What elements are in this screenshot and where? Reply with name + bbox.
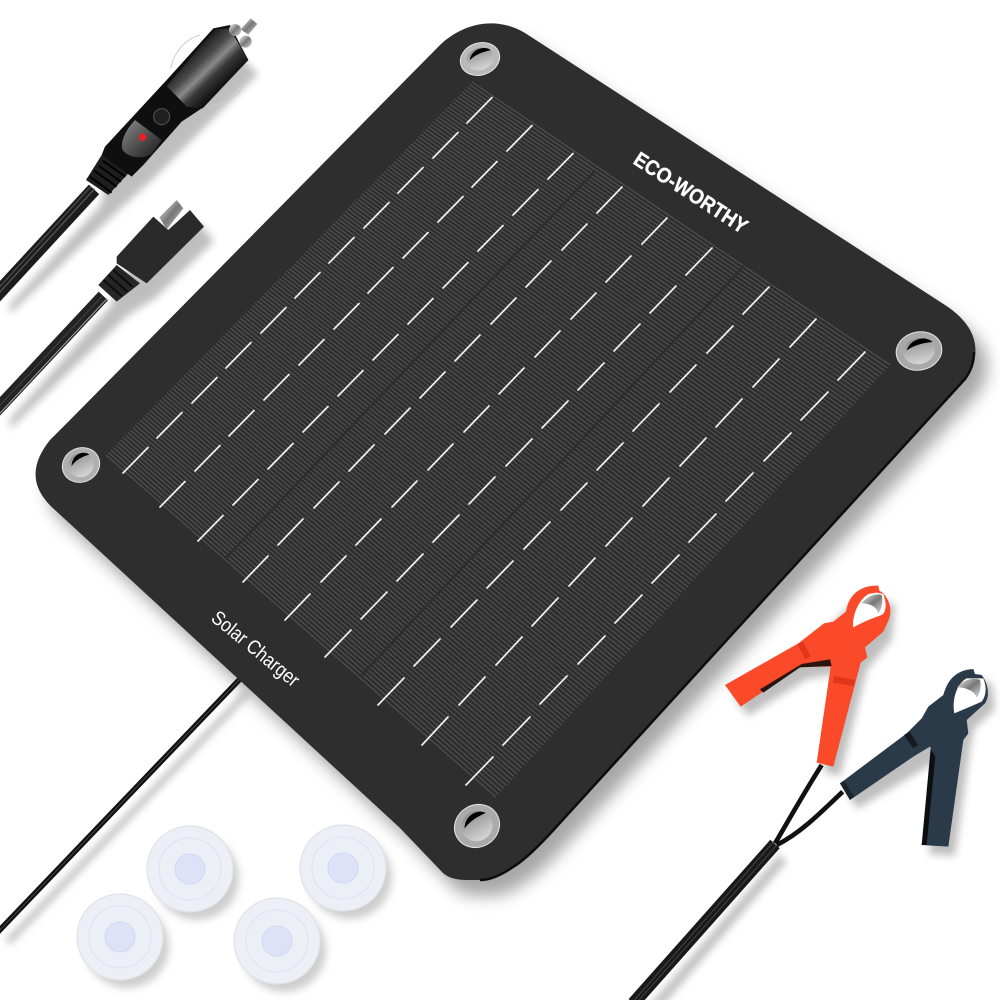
- black alligator clip: [840, 669, 988, 847]
- suction cup: lower left: [77, 894, 163, 980]
- product label: Solar Charger: [207, 607, 304, 692]
- SAE pin: [159, 200, 183, 229]
- module gaps: [225, 171, 744, 677]
- grommet: left: [57, 442, 105, 488]
- cigarette lighter plug with cable: [0, 18, 257, 297]
- red lead wire: [775, 765, 822, 843]
- red alligator clip: [725, 586, 890, 767]
- brand logo: ECO-WORTHY: [629, 148, 752, 239]
- plug barrel: [167, 28, 248, 108]
- solar cell stripes: [106, 82, 890, 797]
- black lead wire: [777, 792, 843, 845]
- black clip body: [840, 669, 988, 847]
- black clip jaw opening: [954, 678, 986, 713]
- suction cup: upper left: [147, 826, 233, 912]
- plug button: [122, 120, 162, 157]
- red clip metal jaw: [862, 594, 882, 613]
- SAE connector with cable: [0, 200, 204, 415]
- plug body: [102, 25, 248, 177]
- panel edge thickness: [480, 352, 974, 880]
- plug fuse cap: [154, 109, 170, 125]
- SAE housing: [117, 210, 204, 283]
- plug cable: [0, 187, 95, 297]
- plug strain relief: [86, 155, 128, 195]
- red clip shaded bands: [797, 641, 855, 686]
- white busbars: [123, 98, 865, 785]
- black clip metal jaw: [957, 679, 981, 697]
- SAE strain relief: [98, 265, 140, 302]
- black clip lever end: [840, 781, 854, 800]
- panel output cable: [0, 679, 240, 935]
- plug side springs: [171, 35, 245, 107]
- suction cup: upper right: [300, 825, 386, 911]
- black clip glossy edge: [922, 748, 935, 845]
- grommet: bottom: [447, 796, 507, 856]
- grommet: top: [456, 38, 504, 80]
- grommet: right: [893, 328, 945, 374]
- plug metal tip: [229, 18, 257, 48]
- red clip body: [725, 586, 890, 767]
- SAE cable: [0, 296, 107, 415]
- suction cup: lower right: [234, 898, 320, 984]
- bottom clip cable: [633, 765, 843, 1000]
- LED indicator: [139, 134, 146, 141]
- red clip jaw opening: [853, 593, 886, 627]
- black clip shaded band: [904, 732, 918, 748]
- red clip inner slot: [760, 659, 832, 693]
